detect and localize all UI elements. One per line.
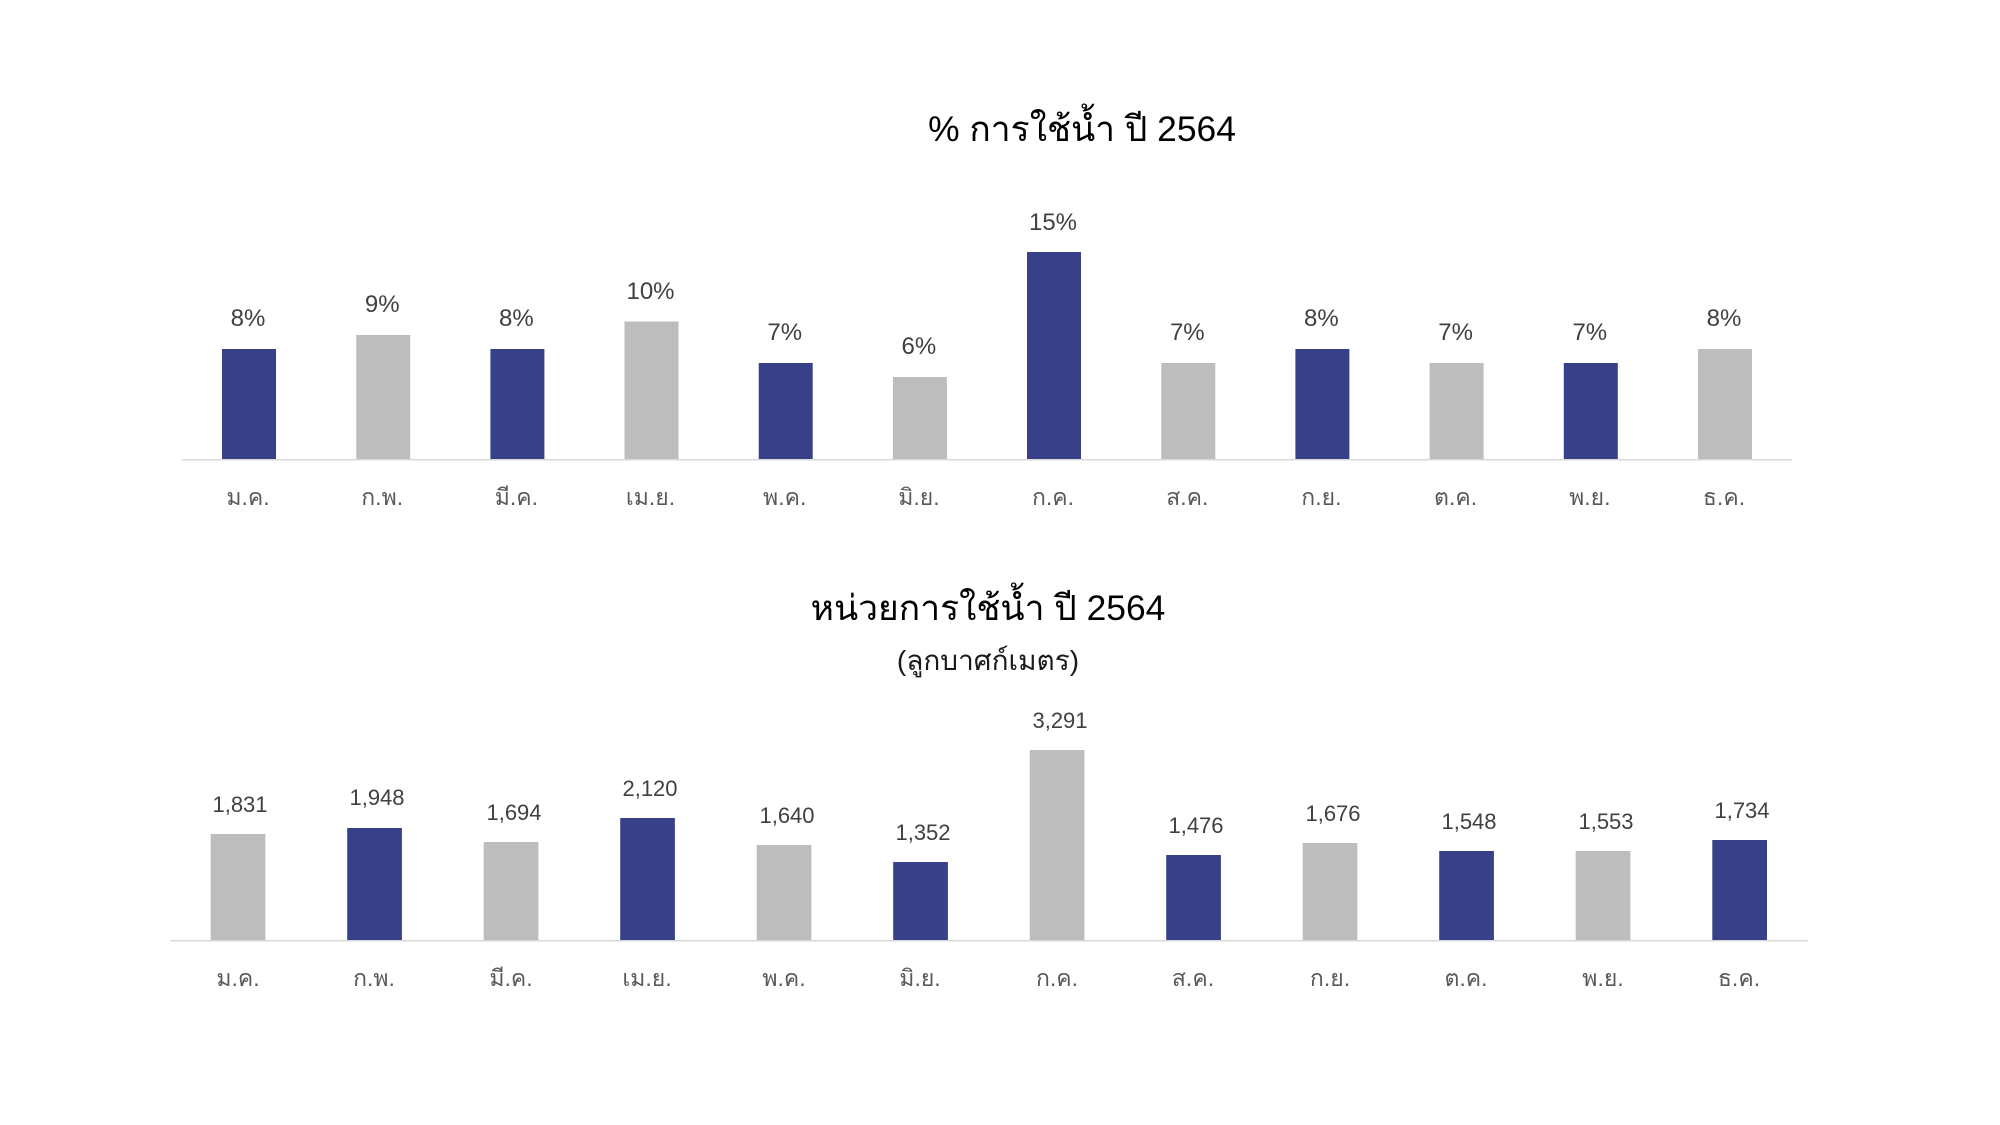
- title: percent water use 2564: % การใช้น้ำ ปี 2564: [928, 103, 1236, 149]
- bar: June 1,352: 1,352: [895, 820, 951, 845]
- bar: October 1,548: ต.ค.: [1444, 965, 1488, 991]
- bar: November 7%: [1564, 319, 1618, 510]
- bar: December 8%: ธ.ค.: [1703, 484, 1745, 510]
- bar: April 10%: เม.ย.: [626, 484, 675, 510]
- bar: March 8%: 8%: [499, 305, 534, 332]
- bar: May 1,640: 1,640: [759, 803, 815, 828]
- bar: September 8%: [1295, 305, 1349, 510]
- bar: September 8%: 8%: [1304, 305, 1339, 332]
- bar: October 7%: ต.ค.: [1434, 484, 1477, 510]
- bar: July 3,291: 3,291: [1032, 708, 1088, 733]
- bar: February 1,948: 1,948: [349, 785, 405, 810]
- bar: September 1,676: 1,676: [1305, 801, 1361, 826]
- bar: September 1,676: [1303, 801, 1361, 991]
- bar: May 1,640: [757, 803, 815, 991]
- bar: March 1,694: มี.ค.: [489, 965, 533, 991]
- bar: November 1,553: [1576, 809, 1634, 991]
- bar: April 2,120: [620, 776, 678, 991]
- bar: July 3,291: [1030, 708, 1088, 991]
- bar: August 1,476: [1166, 813, 1224, 991]
- bar: April 10%: [624, 278, 678, 510]
- bar: April 10%: 10%: [626, 278, 675, 305]
- bar: October 1,548: [1439, 809, 1497, 991]
- bar: August 7%: [1161, 319, 1215, 510]
- bar: January 1,831: [211, 792, 268, 991]
- bar: July 15%: 15%: [1029, 209, 1077, 236]
- bar chart: water units by month: [170, 708, 1808, 991]
- bar: December 1,734: 1,734: [1714, 798, 1770, 823]
- bar: August 1,476: 1,476: [1168, 813, 1224, 838]
- bar: June 1,352: มิ.ย.: [899, 965, 941, 991]
- bar: September 1,676: ก.ย.: [1310, 965, 1350, 991]
- bar: October 7%: 7%: [1438, 319, 1473, 346]
- bar: December 8%: 8%: [1707, 305, 1741, 332]
- bar: December 1,734: [1712, 798, 1770, 991]
- bar: January 8%: 8%: [231, 305, 265, 332]
- bar: March 1,694: 1,694: [486, 800, 542, 825]
- bar: December 1,734: ธ.ค.: [1718, 965, 1760, 991]
- bar: June 6%: มิ.ย.: [898, 484, 940, 510]
- bar: July 15%: [1027, 209, 1081, 510]
- bar: January 8%: [222, 305, 276, 510]
- bar: November 7%: 7%: [1572, 319, 1607, 346]
- bar: July 3,291: ก.ค.: [1036, 965, 1078, 991]
- bar: February 9%: 9%: [365, 291, 400, 318]
- bar: August 7%: 7%: [1170, 319, 1205, 346]
- bar: January 1,831: ม.ค.: [216, 965, 260, 991]
- bar: July 15%: ก.ค.: [1032, 484, 1074, 510]
- bar: June 1,352: [893, 820, 951, 991]
- bar: April 2,120: 2,120: [622, 776, 678, 801]
- bar: August 7%: ส.ค.: [1166, 484, 1208, 510]
- bar: March 8%: มี.ค.: [495, 484, 538, 510]
- bar: January 1,831: 1,831: [212, 792, 268, 817]
- bar: February 1,948: ก.พ.: [353, 965, 395, 991]
- bar: September 8%: ก.ย.: [1301, 484, 1341, 510]
- bar: November 1,553: พ.ย.: [1582, 965, 1624, 991]
- title: water units used 2564: หน่วยการใช้น้ำ ปี 2564: [811, 582, 1165, 628]
- bar: October 7%: [1430, 319, 1484, 510]
- bar: February 9%: [356, 291, 410, 510]
- bar: April 2,120: เม.ย.: [622, 965, 672, 991]
- subtitle: cubic metres: (ลูกบาศก์เมตร): [897, 645, 1079, 678]
- bar: May 7%: พ.ค.: [763, 484, 806, 510]
- bar: February 9%: ก.พ.: [361, 484, 403, 510]
- bar chart: percent water use by month: [182, 209, 1792, 510]
- bar: May 1,640: พ.ค.: [762, 965, 806, 991]
- bar: August 1,476: ส.ค.: [1172, 965, 1214, 991]
- bar: January 8%: ม.ค.: [226, 484, 270, 510]
- bar: June 6%: [893, 333, 947, 510]
- bar: May 7%: 7%: [767, 319, 802, 346]
- bar: November 1,553: 1,553: [1578, 809, 1634, 834]
- bar: June 6%: 6%: [902, 333, 936, 360]
- bar: November 7%: พ.ย.: [1569, 484, 1611, 510]
- bar: December 8%: [1698, 305, 1752, 510]
- bar: October 1,548: 1,548: [1441, 809, 1497, 834]
- bar: March 1,694: [484, 800, 542, 991]
- bar: February 1,948: [347, 785, 405, 991]
- bar: March 8%: [490, 305, 544, 510]
- bar: May 7%: [759, 319, 813, 510]
